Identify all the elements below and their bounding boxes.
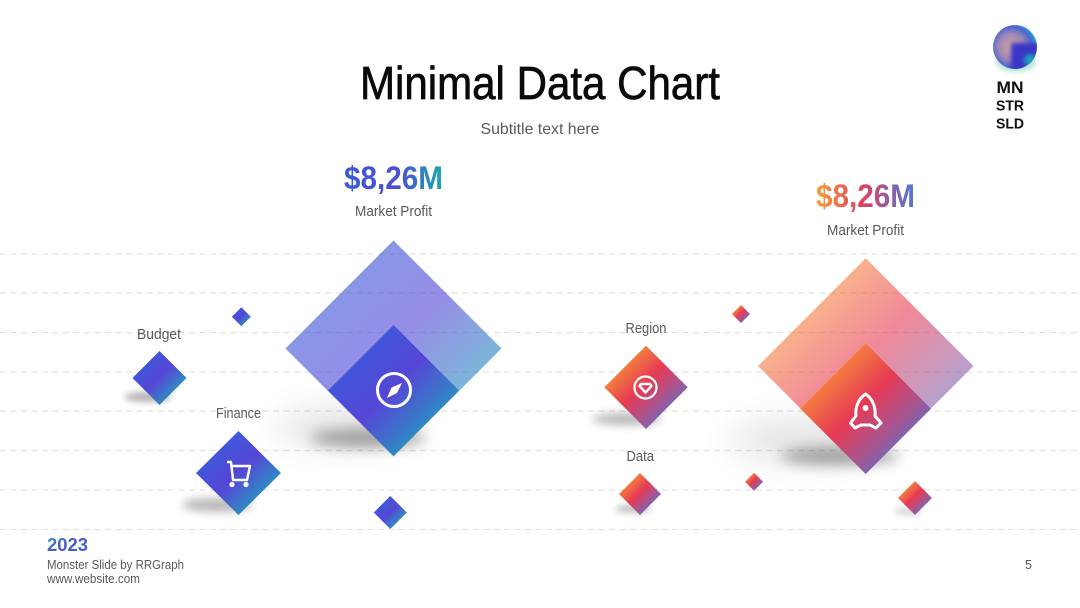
icon: rocket [850, 394, 881, 428]
subtitle: Subtitle text here [480, 121, 600, 138]
icon: compass [378, 374, 410, 406]
left label: Market Profit: Market Profit [355, 204, 432, 220]
right value: $8,26M: $8,26M [816, 178, 915, 214]
small diamond left bottom [374, 496, 407, 529]
logo [993, 25, 1040, 132]
logo: SLD [996, 116, 1024, 132]
diamond: Finance with cart [182, 431, 281, 515]
small diamond left top [232, 307, 251, 326]
small diamond right middle [745, 473, 763, 491]
left value: $8,26M: $8,26M [344, 160, 443, 196]
right big diamond with rocket [730, 258, 974, 474]
footer website: www.website.com [46, 572, 140, 586]
diamond: Data [615, 473, 661, 515]
footer year: 2023 [47, 535, 88, 555]
icon: shopping cart [227, 462, 250, 486]
small diamond right bottom [894, 481, 932, 515]
diamond: Region with gem [592, 346, 688, 429]
logo: MN [996, 79, 1024, 97]
left big diamond with compass [275, 240, 502, 456]
background grid lines [0, 254, 1080, 530]
label: Region: Region [626, 321, 666, 337]
right label: Market Profit: Market Profit [827, 223, 904, 239]
icon: gem in ring [634, 376, 656, 398]
diamond: Budget [124, 351, 186, 405]
footer credit: Monster Slide by RRGraph [47, 558, 184, 572]
small diamond right top [732, 305, 750, 323]
logo: STR [996, 98, 1024, 114]
label: Finance: Finance [216, 406, 261, 422]
label: Data: Data [626, 449, 655, 465]
page number: 5 [1025, 558, 1032, 572]
label: Budget: Budget [137, 327, 181, 343]
title: Minimal Data Chart [360, 57, 720, 109]
